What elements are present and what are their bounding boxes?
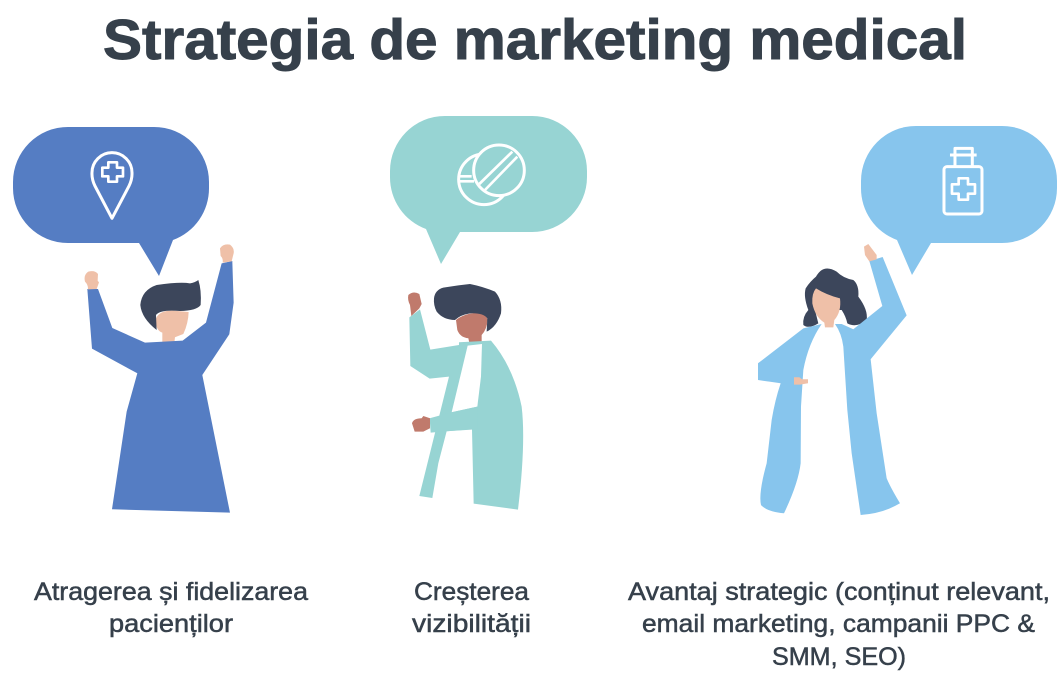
caption: visibility growth: vizibilității (412, 610, 531, 638)
caption: strategic advantage: email marketing, campanii PPC & (642, 610, 1035, 638)
person: teal figure in coat (408, 284, 523, 510)
panel: strategic advantage (758, 126, 1057, 515)
icon: medicine bottle (944, 148, 982, 214)
speech bubble: teal (390, 116, 587, 264)
speech bubble: light blue (861, 126, 1057, 275)
caption: patient attraction: pacienților (109, 610, 233, 638)
caption: strategic advantage (628, 578, 1050, 671)
caption: visibility growth: Creșterea (414, 578, 529, 606)
panel: visibility growth (390, 116, 587, 510)
caption: strategic advantage: SMM, SEO) (772, 643, 906, 671)
title: Strategia de marketing medical (103, 8, 967, 72)
person: blue figure with raised arms (85, 244, 234, 513)
caption: patient attraction (34, 578, 308, 638)
caption: strategic advantage: Avantaj strategic (conținut relevant, (628, 578, 1050, 606)
icon: pills (459, 145, 524, 205)
person: light blue figure waving (758, 244, 907, 515)
icon: map pin with cross (92, 153, 132, 218)
caption: patient attraction: Atragerea și fidelizarea (34, 578, 308, 606)
caption: visibility growth (412, 578, 531, 638)
panel: patient attraction (13, 127, 234, 513)
speech bubble: blue (13, 127, 209, 276)
